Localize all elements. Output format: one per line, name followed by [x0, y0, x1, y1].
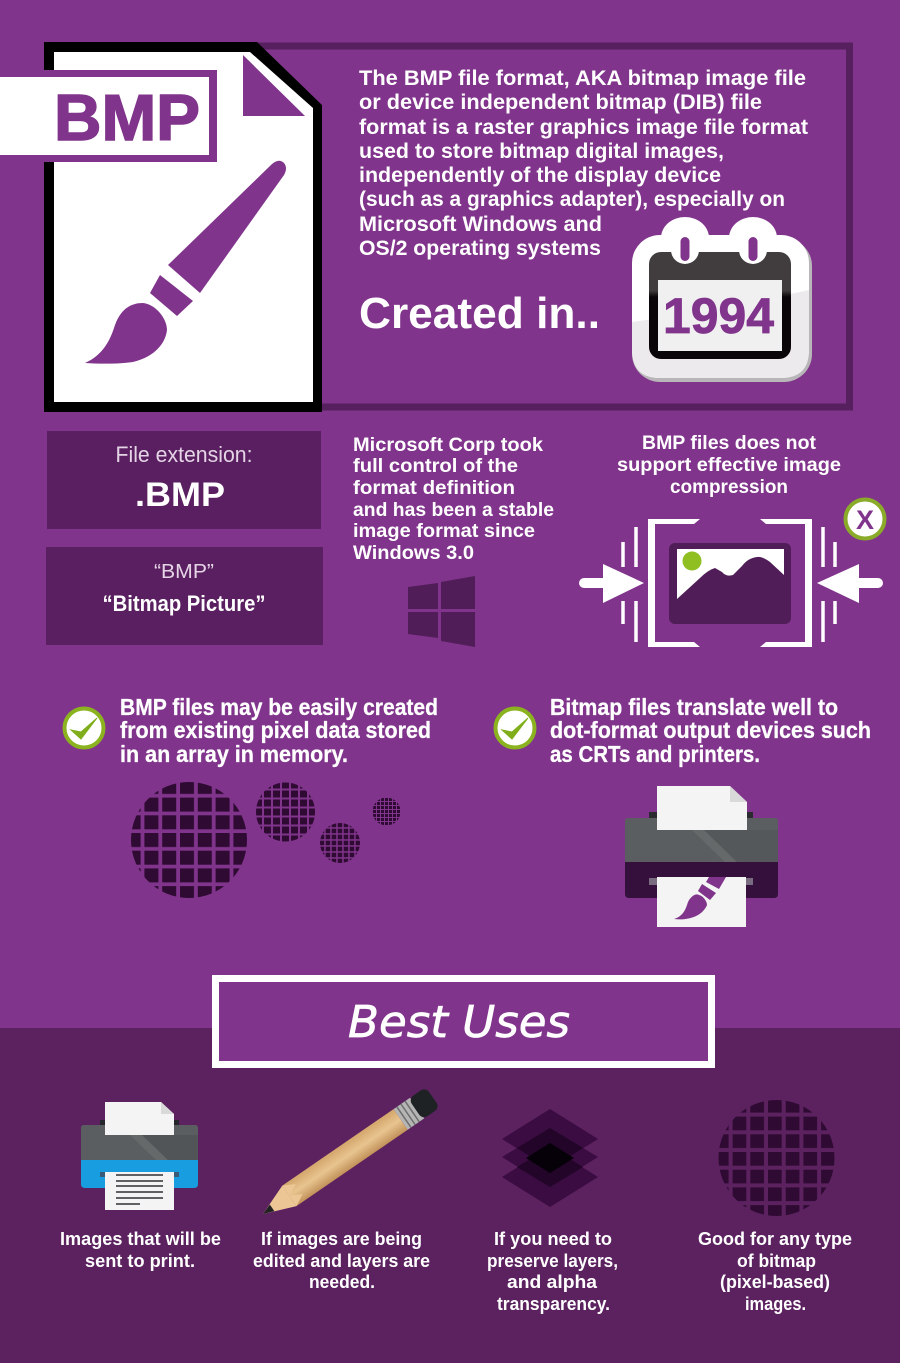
icon: pixel grid circles — [131, 782, 400, 898]
heading box: best uses — [216, 978, 712, 1064]
panel: file extension: File extension: — [116, 442, 252, 467]
text block: compression — [617, 432, 841, 498]
text block: format description: independently of the display device — [359, 164, 721, 187]
icon: check left — [64, 708, 104, 748]
text block: compression: BMP files does not — [642, 432, 816, 454]
text block: Microsoft Corp: Windows 3.0 — [353, 542, 474, 564]
text block: pixel data — [120, 694, 438, 767]
arrow: left — [579, 564, 644, 603]
text block: layers: preserve layers, — [487, 1251, 618, 1271]
text block: format description: The BMP file format, AKA bitmap image file — [359, 67, 806, 90]
text block: format description: (such as a graphics adapter), especially on — [359, 188, 785, 211]
icon: printer with brush — [625, 786, 778, 927]
text block: pixel data: BMP files may be easily created — [120, 694, 438, 720]
text block: bitmap: Good for any type — [698, 1229, 852, 1249]
text block: pixel data: from existing pixel data stored — [120, 717, 431, 743]
text block: format description: OS/2 operating systems — [359, 237, 601, 260]
panel: file extension — [47, 431, 321, 529]
text block: printers: dot-format output devices such — [550, 717, 871, 743]
text block: format description: Microsoft Windows and — [359, 213, 602, 236]
text block: pixel data: in an array in memory. — [120, 741, 348, 767]
text block: Microsoft Corp: and has been a stable — [353, 499, 554, 521]
text block: printers — [550, 694, 871, 767]
icon: blue printer — [81, 1102, 198, 1210]
text block: Microsoft Corp: Microsoft Corp took — [353, 434, 543, 456]
icon: check right — [496, 708, 534, 748]
text block: format description: used to store bitmap digital images, — [359, 140, 724, 163]
text block: edited: needed. — [309, 1272, 375, 1292]
text block: format description — [359, 67, 808, 260]
icon: calendar 1994: 1994 — [663, 288, 774, 344]
text block: layers — [487, 1229, 618, 1314]
text block: Microsoft Corp: image format since — [353, 520, 535, 542]
icon: small brush — [674, 877, 726, 919]
text block: bitmap: images. — [745, 1294, 806, 1314]
text block: Microsoft Corp: format definition — [353, 477, 515, 499]
dark bottom band — [0, 1028, 900, 1363]
text block: edited — [253, 1229, 430, 1292]
text block: Microsoft Corp: full control of the — [353, 455, 518, 477]
panel: bitmap picture: “Bitmap Picture” — [102, 591, 266, 616]
text block: bitmap: (pixel-based) — [720, 1272, 830, 1292]
text block: edited: edited and layers are — [253, 1251, 430, 1271]
label: BMP tag: BMP — [54, 81, 200, 154]
text block: layers: and alpha — [507, 1272, 598, 1292]
icon: X badge: X — [856, 505, 874, 535]
icon: compression image — [579, 519, 883, 647]
icon: X badge — [846, 500, 884, 538]
heading box: best uses: Best Uses — [348, 997, 570, 1048]
heading: created in: Created in.. — [359, 289, 600, 338]
icon: calendar 1994 — [632, 217, 812, 382]
text block: bitmap — [698, 1229, 852, 1314]
panel: file extension: .BMP — [135, 476, 225, 514]
icon: layers — [502, 1109, 598, 1207]
panel: intro frame — [250, 46, 850, 407]
text block: printers: as CRTs and printers. — [550, 741, 760, 767]
text block: printers: Bitmap files translate well to — [550, 694, 838, 720]
icon: BMP file document — [44, 42, 322, 412]
panel: bitmap picture — [46, 547, 323, 645]
text block: print: sent to print. — [85, 1251, 195, 1271]
icon: paintbrush — [85, 161, 286, 364]
text block: format description: format is a raster graphics image file format — [359, 116, 808, 139]
icon: pencil — [256, 1087, 440, 1224]
text block: layers: transparency. — [497, 1294, 610, 1314]
text block: compression: compression — [670, 476, 788, 498]
arrow: right — [817, 564, 883, 603]
text block: edited: If images are being — [261, 1229, 422, 1249]
text block: bitmap: of bitmap — [737, 1251, 816, 1271]
text block: layers: If you need to — [494, 1229, 612, 1249]
icon: pixel grid circle — [718, 1100, 834, 1216]
text block: print: Images that will be — [60, 1229, 221, 1249]
label: BMP tag — [0, 70, 217, 162]
text block: Microsoft Corp — [353, 434, 554, 564]
text block: print — [60, 1229, 221, 1271]
text block: format description: or device independent bitmap (DIB) file — [359, 91, 762, 114]
panel: bitmap picture: “BMP” — [154, 561, 214, 583]
text block: compression: support effective image — [617, 454, 841, 476]
icon: Windows logo — [408, 576, 475, 647]
